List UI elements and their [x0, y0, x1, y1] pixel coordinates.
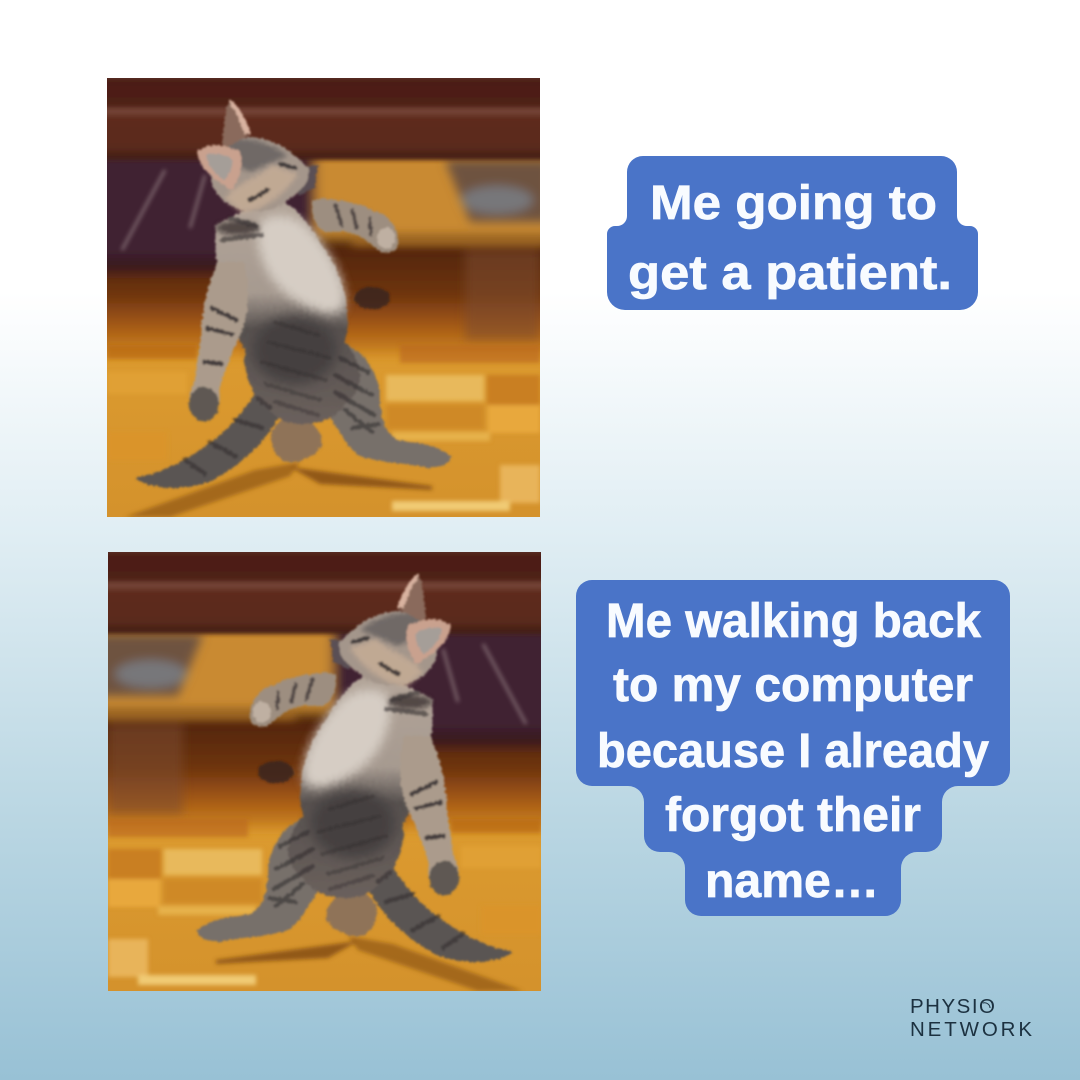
photo background: room and parquet floor — [90, 78, 560, 517]
belly shading — [253, 316, 337, 384]
caption text line 3: because I already — [597, 725, 989, 778]
photo: mirrored kitten strutting back — [88, 546, 558, 991]
right hind leg — [330, 340, 451, 468]
tail — [135, 388, 282, 488]
left front arm — [189, 262, 248, 419]
parquet tiles — [107, 345, 540, 511]
caption bubble: top — [607, 156, 978, 310]
front ear — [197, 145, 242, 190]
logo word two: NETWORK — [910, 1018, 1032, 1041]
top wooden furniture — [100, 72, 547, 160]
caption text line 5: name… — [705, 855, 879, 908]
floor reflection streaks — [122, 170, 205, 250]
bubble shape — [607, 156, 978, 310]
photo: kitten strutting right — [90, 72, 560, 517]
neck ruff shading — [216, 221, 260, 235]
right front arm — [312, 199, 398, 253]
kitten — [135, 100, 451, 488]
chest highlight — [258, 216, 345, 313]
diagonal shadow under tail — [125, 462, 300, 517]
shadow line under kitten — [290, 467, 432, 490]
paw highlight — [377, 228, 395, 248]
face shading — [225, 165, 298, 212]
main body — [215, 198, 360, 424]
logo swirl inside the O — [983, 1003, 990, 1008]
caption text line 2: to my computer — [613, 659, 973, 712]
back ear — [222, 100, 251, 150]
background paw — [354, 287, 390, 309]
floor shadows — [125, 462, 432, 517]
middle hind foot — [271, 418, 322, 462]
caption text line 1: Me going to — [650, 177, 937, 230]
forehead shading — [225, 139, 288, 172]
caption text line 4: forgot their — [665, 789, 921, 842]
back ear rim — [229, 100, 251, 134]
inner ear — [206, 153, 232, 180]
head — [210, 137, 309, 212]
whisker fur behind face — [298, 165, 318, 196]
bubble shape — [576, 580, 1010, 916]
caption text line 2: get a patient. — [628, 247, 952, 300]
caption bubble: bottom — [576, 580, 1010, 916]
logo word one: PHYSIO — [910, 995, 995, 1018]
logo: Physio Network — [910, 995, 1032, 1041]
caption text line 1: Me walking back — [606, 595, 981, 648]
eyes and stripes — [185, 164, 378, 474]
left paw — [189, 387, 219, 421]
